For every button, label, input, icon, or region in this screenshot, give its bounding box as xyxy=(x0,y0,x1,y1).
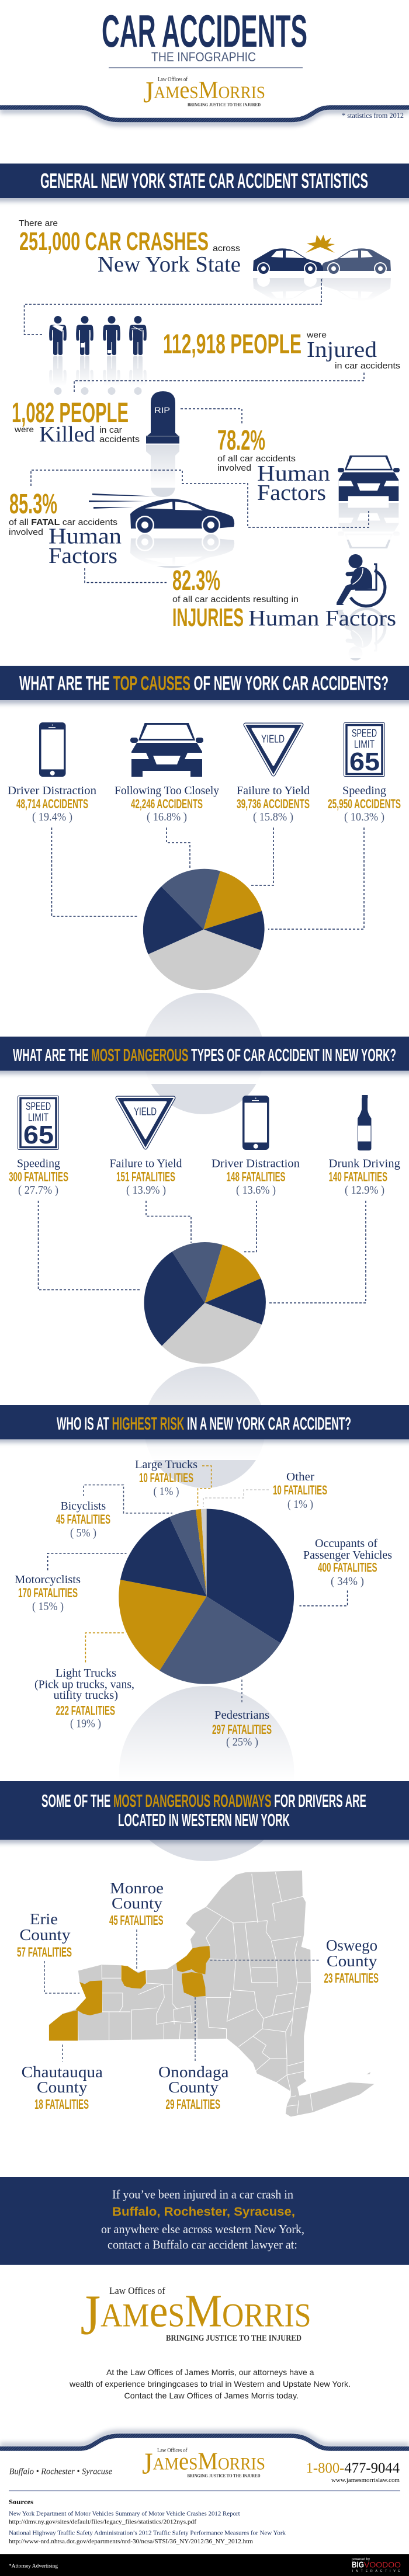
reflections under icons and pies xyxy=(47,274,402,1861)
logo: Big Voodoo Interactive: INTERACTIVE xyxy=(352,2570,401,2573)
sources: Sources xyxy=(9,2498,33,2506)
label: motorcyclists: ( 15% ) xyxy=(32,1600,64,1613)
panel: header xyxy=(0,5,409,124)
text: contact a lawyer: or anywhere else across western New York, xyxy=(101,2222,304,2236)
cause: speeding: 65 xyxy=(349,748,380,776)
logo: Big Voodoo Interactive: powered by xyxy=(352,2558,370,2561)
label: Chautauqua County: Chautauqua xyxy=(22,2063,103,2081)
logo: James Morris: BRINGING JUSTICE TO THE INJURED xyxy=(188,102,261,107)
text: firm description: At the Law Offices of James Morris, our attorneys have a xyxy=(106,2368,314,2377)
type: speeding: ( 27.7% ) xyxy=(18,1184,58,1197)
icon: car front view xyxy=(338,456,400,501)
text: firm description: Contact the Law Offices of James Morris today. xyxy=(124,2391,299,2400)
panel: top causes xyxy=(0,666,409,990)
cause: speeding: LIMIT xyxy=(354,738,375,750)
type: speeding: Speeding xyxy=(17,1157,60,1170)
sources xyxy=(9,2498,286,2545)
stat: people killed: 1,082 PEOPLE xyxy=(12,398,129,429)
stat: 82.3 percent injuries: INJURIES xyxy=(172,603,244,632)
stat: 85.3 percent fatal xyxy=(9,489,122,568)
label: Oswego County: Oswego xyxy=(326,1937,377,1954)
label: Oswego County xyxy=(324,1937,379,1986)
logo: James Morris large: Law Offices of xyxy=(109,2285,165,2296)
type: failure to yield: ( 13.9% ) xyxy=(126,1184,166,1197)
logo: James Morris: AM xyxy=(154,83,179,102)
logo: James Morris large: AM xyxy=(100,2297,150,2334)
label: occupants of passenger vehicles: Passenger Vehicles xyxy=(303,1549,392,1562)
logo: James Morris large xyxy=(81,2283,311,2346)
cause: driver distraction xyxy=(8,722,96,823)
cause: failure to yield: YIELD xyxy=(261,733,285,745)
stat: 82.3 percent injuries: of all car accidents resulting in xyxy=(172,595,299,604)
stat: people killed: in car xyxy=(99,425,122,435)
label: light trucks xyxy=(34,1667,134,1730)
type: driver distraction: 148 FATALITIES xyxy=(227,1169,285,1184)
stat: 85.3 percent fatal: of all FATAL car accidents xyxy=(9,517,117,527)
label: large trucks: Large Trucks xyxy=(135,1458,197,1471)
label: Onondaga County: County xyxy=(168,2078,219,2096)
label: bicyclists: Bicyclists xyxy=(61,1500,106,1513)
type: speeding: LIMIT xyxy=(28,1111,48,1124)
pie chart: dangerous types xyxy=(144,1242,266,1364)
banner: top causes xyxy=(0,666,409,704)
label: large trucks: ( 1% ) xyxy=(153,1485,179,1498)
logo: James Morris large: J xyxy=(81,2283,103,2346)
label: light trucks: ( 19% ) xyxy=(70,1717,101,1730)
ribbon divider xyxy=(0,2432,409,2449)
logo: James Morris large: BRINGING JUSTICE TO THE INJURED xyxy=(166,2334,301,2343)
cause: failure to yield xyxy=(237,725,310,823)
text: firm description: wealth of experience bringingcases to trial in Western and Upstate New York. xyxy=(69,2379,351,2389)
panel: dangerous roadways xyxy=(0,1781,409,2116)
label: other: 10 FATALITIES xyxy=(273,1483,327,1497)
cause: following too closely xyxy=(115,723,219,823)
banner: dangerous roadways xyxy=(0,1781,409,1843)
stat: car crashes: 251,000 CAR CRASHES xyxy=(19,227,209,256)
type: speeding: SPEED xyxy=(26,1100,51,1112)
stat: 85.3 percent fatal: involved xyxy=(9,527,43,537)
stat: people killed: accidents xyxy=(99,434,140,444)
type: drunk driving: ( 12.9% ) xyxy=(345,1184,384,1197)
label: Onondaga County: 29 FATALITIES xyxy=(166,2097,220,2112)
panel: highest risk xyxy=(0,1405,409,1748)
logo: James Morris large: eSMORRIS xyxy=(150,2286,320,2337)
cause: driver distraction: ( 19.4% ) xyxy=(32,811,72,823)
sources: http://www-nrd.nhtsa.dot.gov/departments/nrd-30/ncsa/STSI/36_NY/2012/36_NY_2012.htm xyxy=(9,2539,253,2545)
type: driver distraction xyxy=(212,1096,300,1197)
map: New York State counties xyxy=(49,1871,375,2116)
stat: 78.2 percent human factors: Human xyxy=(257,461,330,486)
stat: 78.2 percent human factors: 78.2% xyxy=(217,425,265,456)
stat: people injured: 112,918 PEOPLE xyxy=(163,328,301,359)
label: motorcyclists: 170 FATALITIES xyxy=(18,1586,78,1600)
label: light trucks: Light Trucks xyxy=(56,1667,116,1680)
text: firm description xyxy=(69,2368,351,2400)
stat: people injured xyxy=(163,328,400,371)
type: drunk driving: Drunk Driving xyxy=(328,1157,400,1170)
label: other: Other xyxy=(286,1470,314,1483)
stat: people injured: in car accidents xyxy=(335,361,400,371)
stat: car crashes: There are xyxy=(19,218,58,228)
cause: following too closely: ( 16.8% ) xyxy=(147,811,187,823)
text: contact a lawyer xyxy=(101,2222,304,2252)
sources: http://dmv.ny.gov/sites/default/files/legacy_files/statistics/2012nys.pdf xyxy=(9,2519,197,2525)
type: drunk driving xyxy=(328,1095,400,1197)
label: Onondaga County xyxy=(158,2063,229,2112)
pie chart: top causes xyxy=(143,869,265,990)
logo: James Morris footer: BRINGING JUSTICE TO THE INJURED xyxy=(187,2473,261,2478)
cause: failure to yield: ( 15.8% ) xyxy=(253,811,293,823)
label: bicyclists: ( 5% ) xyxy=(70,1527,96,1539)
label: Chautauqua County: 18 FATALITIES xyxy=(34,2097,89,2112)
logo: Big Voodoo Interactive: BIG xyxy=(352,2560,364,2570)
type: failure to yield xyxy=(110,1098,182,1197)
label: Monroe County: Monroe xyxy=(110,1879,164,1897)
stat: 78.2 percent human factors xyxy=(217,425,330,505)
label: other: ( 1% ) xyxy=(287,1498,313,1511)
banner: general statistics xyxy=(0,164,409,201)
logo: James Morris footer: J xyxy=(142,2447,154,2481)
label: large trucks: 10 FATALITIES xyxy=(139,1470,193,1485)
stat: car crashes: New York State xyxy=(98,252,241,277)
label: Oswego County: County xyxy=(327,1952,377,1970)
icon: speeding car xyxy=(89,493,234,534)
text: office locations: Buffalo • Rochester • Syracuse xyxy=(9,2467,112,2476)
logo: James Morris: J xyxy=(143,76,155,109)
logo: James Morris xyxy=(143,76,265,109)
stat: 85.3 percent fatal: 85.3% xyxy=(9,489,57,520)
label: motorcyclists xyxy=(15,1573,81,1613)
cause: speeding xyxy=(328,723,401,823)
label: light trucks: (Pick up trucks, vans, xyxy=(34,1678,134,1691)
stat: car crashes: across xyxy=(213,244,240,253)
cause: following too closely: 42,246 ACCIDENTS xyxy=(131,797,203,811)
label: pedestrians: 297 FATALITIES xyxy=(212,1722,272,1737)
stat: 85.3 percent fatal: Human xyxy=(48,524,122,549)
logo: James Morris: Law Offices of xyxy=(158,77,188,83)
text: injured intro: If you’ve been injured in a car crash in xyxy=(112,2188,293,2202)
label: light trucks: 222 FATALITIES xyxy=(56,1703,115,1718)
logo: James Morris footer: AM xyxy=(153,2454,179,2474)
stat: 82.3 percent injuries xyxy=(172,565,396,632)
label: Monroe County: County xyxy=(112,1894,163,1912)
subtitle: THE INFOGRAPHIC xyxy=(151,50,256,64)
icon: two cars crashing xyxy=(253,235,391,275)
bottom bar xyxy=(0,2554,409,2576)
type: speeding: 65 xyxy=(23,1121,54,1149)
banner: highest risk xyxy=(0,1405,409,1442)
label: bicyclists xyxy=(56,1500,110,1539)
contact: phone and website: 1-800-477-9044 xyxy=(306,2460,400,2476)
label: Erie County xyxy=(17,1910,72,1960)
type: failure to yield: 151 FATALITIES xyxy=(116,1169,175,1184)
logo: James Morris: eSMORRIS xyxy=(179,77,270,104)
logo: Big Voodoo Interactive: VOODOO xyxy=(364,2560,401,2570)
stat: 78.2 percent human factors: of all car accidents xyxy=(217,454,296,464)
banner: most dangerous types xyxy=(0,1037,409,1074)
label: motorcyclists: Motorcyclists xyxy=(15,1573,81,1586)
note: statistics year: * statistics from 2012 xyxy=(342,111,404,120)
cause: following too closely: Following Too Closely xyxy=(115,784,219,797)
logo: Big Voodoo Interactive xyxy=(352,2558,401,2573)
label: large trucks xyxy=(135,1458,197,1498)
logo: James Morris footer xyxy=(142,2447,265,2481)
type: failure to yield: Failure to Yield xyxy=(110,1157,182,1170)
stat: 78.2 percent human factors: Factors xyxy=(257,481,326,505)
cause: speeding: Speeding xyxy=(342,784,386,797)
label: occupants of passenger vehicles: ( 34% ) xyxy=(331,1575,364,1588)
pie chart: highest risk xyxy=(119,1509,294,1684)
label: pedestrians: ( 25% ) xyxy=(226,1736,258,1748)
panel: footer xyxy=(0,2432,409,2576)
label: bicyclists: 45 FATALITIES xyxy=(56,1512,110,1527)
label: Erie County: Erie xyxy=(30,1910,58,1928)
label: Onondaga County: Onondaga xyxy=(158,2063,229,2081)
stat: people injured: were xyxy=(306,330,327,339)
stat: people killed xyxy=(12,398,140,447)
stat: 82.3 percent injuries: 82.3% xyxy=(172,565,220,596)
logo: James Morris footer: Law Offices of xyxy=(157,2448,188,2454)
panel: general statistics xyxy=(0,164,409,632)
label: other xyxy=(273,1470,327,1511)
stat: people killed: were xyxy=(14,425,34,434)
panel: most dangerous types xyxy=(0,1037,409,1364)
label: occupants of passenger vehicles xyxy=(303,1537,392,1588)
icon: tombstone xyxy=(146,391,179,444)
cause: driver distraction: Driver Distraction xyxy=(8,784,96,797)
stat: people injured: Injured xyxy=(307,338,377,362)
type: failure to yield: YIELD xyxy=(134,1106,157,1118)
stat: 85.3 percent fatal: Factors xyxy=(48,544,117,568)
cause: speeding: SPEED xyxy=(352,726,377,739)
stat: 78.2 percent human factors: involved xyxy=(217,463,251,473)
label: Monroe County: 45 FATALITIES xyxy=(109,1913,164,1928)
contact: phone and website: www.jamesmorrislaw.com xyxy=(331,2477,400,2484)
icon: injured people xyxy=(50,316,146,355)
sources: New York Department of Motor Vehicles Summary of Motor Vehicle Crashes 2012 Report xyxy=(9,2511,240,2517)
icon: tombstone: RIP xyxy=(154,405,170,415)
label: Erie County: 57 FATALITIES xyxy=(17,1945,72,1960)
text: contact a lawyer: contact a Buffalo car accident lawyer at: xyxy=(108,2238,297,2252)
ribbon divider xyxy=(0,107,409,124)
type: speeding: 300 FATALITIES xyxy=(9,1169,68,1184)
type: driver distraction: Driver Distraction xyxy=(212,1157,300,1170)
label: Erie County: County xyxy=(20,1926,71,1944)
cause: driver distraction: 48,714 ACCIDENTS xyxy=(16,797,88,811)
label: Chautauqua County xyxy=(22,2063,103,2112)
label: Monroe County xyxy=(109,1879,164,1928)
label: occupants of passenger vehicles: Occupants of xyxy=(315,1537,377,1550)
type: driver distraction: ( 13.6% ) xyxy=(236,1184,276,1197)
label: light trucks: utility trucks) xyxy=(54,1689,118,1702)
label: Chautauqua County: County xyxy=(37,2078,88,2096)
panel: call to action xyxy=(0,2177,409,2265)
text: cities: Buffalo, Rochester, Syracuse, xyxy=(112,2205,295,2219)
stat: car crashes xyxy=(19,218,241,277)
stat: people killed: Killed xyxy=(39,422,95,447)
stat: 82.3 percent injuries: Human Factors xyxy=(248,606,396,631)
label: pedestrians xyxy=(212,1709,272,1748)
logo: James Morris footer: eSMORRIS xyxy=(179,2448,269,2475)
cause: failure to yield: Failure to Yield xyxy=(237,784,310,797)
bottom bar: *Attorney Advertising xyxy=(9,2564,58,2570)
sources: National Highway Traffic Safety Administration’s 2012 Traffic Safety Performance Measures for New York xyxy=(9,2530,286,2537)
icon: wheelchair xyxy=(337,554,385,606)
cause: failure to yield: 39,736 ACCIDENTS xyxy=(237,797,310,811)
type: speeding xyxy=(9,1096,68,1197)
contact: phone and website xyxy=(306,2460,400,2484)
cause: speeding: ( 10.3% ) xyxy=(344,811,384,823)
label: pedestrians: Pedestrians xyxy=(214,1709,269,1722)
